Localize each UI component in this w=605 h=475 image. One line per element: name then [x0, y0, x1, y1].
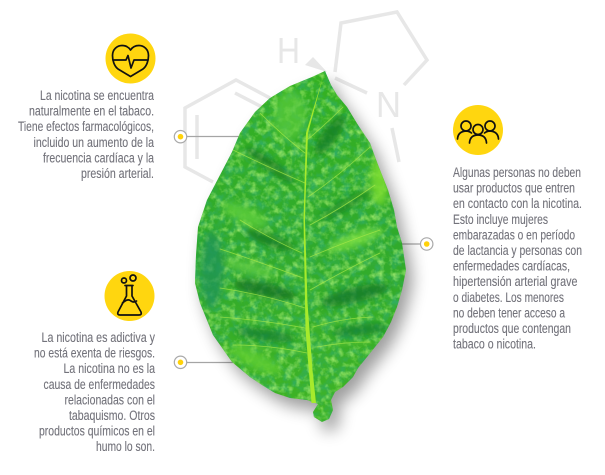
- text block: bottom left: La nicotina no es la: [64, 361, 155, 376]
- text block: bottom left: humo lo son.: [96, 439, 155, 454]
- connector line: bottom left: [187, 362, 233, 364]
- icon: flask with bubbles: [104, 271, 154, 321]
- text block: bottom left: tabaquismo. Otros: [69, 408, 155, 423]
- marker: top left: [174, 130, 187, 143]
- leaf midrib: [304, 77, 323, 403]
- text block: right: no deben tener acceso a: [453, 305, 565, 320]
- text block: right: hipertensión arterial grave: [453, 274, 578, 289]
- text block: right: Esto incluye mujeres: [453, 212, 548, 227]
- text block: top left: [18, 88, 154, 181]
- text block: top left: incluido un aumento de la: [34, 135, 154, 150]
- tobacco leaf: [185, 60, 415, 432]
- icon: heart with pulse: [106, 34, 156, 84]
- text block: bottom left: causa de enfermedades: [44, 377, 155, 392]
- text block: right: o diabetes. Los menores: [453, 290, 564, 305]
- background molecule diagram: H: [277, 30, 300, 71]
- text block: right: enfermedades cardíacas,: [453, 259, 570, 274]
- marker: right: [420, 238, 433, 250]
- text block: right: [453, 165, 582, 352]
- text block: right: productos que contengan: [453, 321, 571, 336]
- text block: top left: La nicotina se encuentra: [40, 88, 154, 103]
- text block: top left: naturalmente en el tabaco.: [29, 104, 154, 119]
- text block: bottom left: La nicotina es adictiva y: [42, 330, 155, 345]
- text block: bottom left: productos químicos en el: [39, 424, 155, 439]
- connector line: top left: [187, 136, 242, 138]
- text block: bottom left: no está exenta de riesgos.: [34, 346, 155, 361]
- leaf vein glow: [220, 107, 380, 353]
- leaf veins: [220, 107, 380, 353]
- text block: bottom left: relacionadas con el: [64, 392, 155, 407]
- text block: right: tabaco o nicotina.: [453, 337, 536, 352]
- background molecule diagram: N: [376, 84, 401, 125]
- icon: group of people: [453, 105, 503, 155]
- connector line: right: [400, 243, 420, 245]
- text block: top left: presión arterial.: [81, 166, 154, 181]
- background molecule diagram: [185, 12, 427, 182]
- text block: bottom left: [34, 330, 155, 454]
- text block: top left: Tiene efectos farmacológicos,: [18, 119, 154, 134]
- marker: bottom left: [174, 356, 187, 368]
- text block: top left: frecuencia cardíaca y la: [43, 150, 154, 165]
